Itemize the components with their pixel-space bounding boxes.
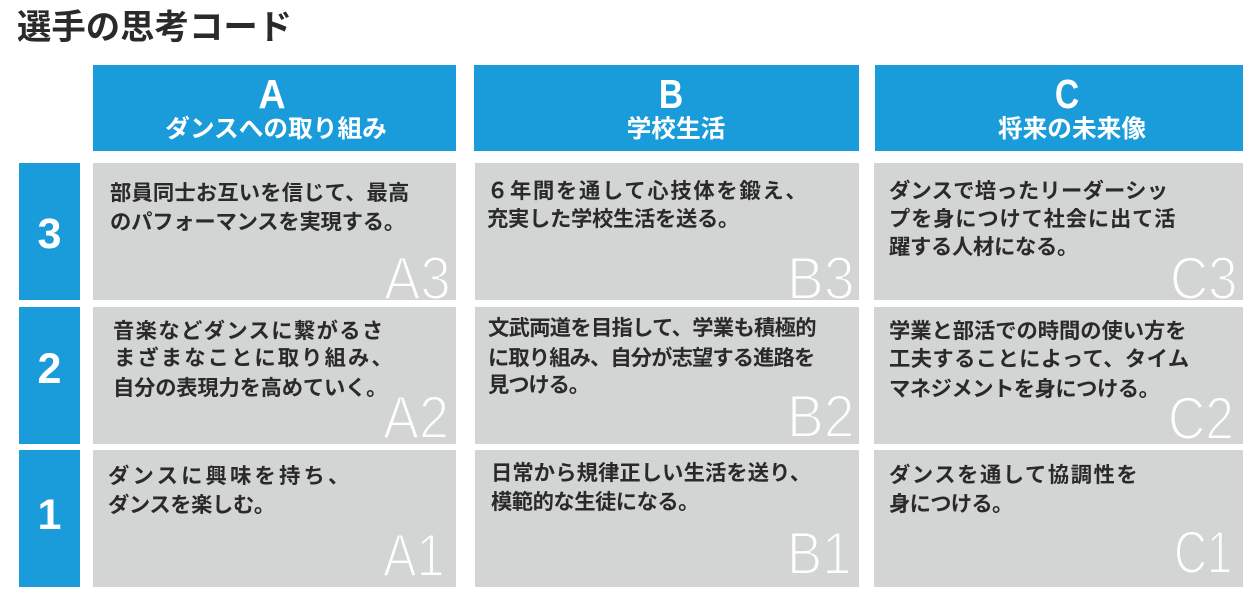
- cell A1: ダンスに興味を持ち、: [108, 464, 353, 488]
- cell A3: 部員同士お互いを信じて、最高: [110, 181, 409, 205]
- cell C1: [874, 450, 1243, 587]
- cell A2: まざまなことに取り組み、: [114, 346, 395, 370]
- cell B2: 文武両道を目指して、学業も積極的: [488, 316, 816, 340]
- row header 3: 3: [38, 210, 61, 258]
- row header 3: [19, 163, 80, 300]
- column header B: B: [659, 71, 683, 117]
- cell C2: 学業と部活での時間の使い方を: [889, 319, 1186, 343]
- cell B3: 充実した学校生活を送る。: [487, 207, 739, 231]
- cell A2: [93, 307, 456, 444]
- title: 選手の思考コード: [17, 9, 292, 47]
- cell B3: [475, 163, 859, 300]
- column header C: [875, 65, 1243, 151]
- cell C2: 工夫することによって、タイム: [889, 347, 1190, 371]
- cell B2: [475, 307, 859, 444]
- cell A1: A1: [383, 522, 445, 587]
- cell B2: 見つける。: [488, 373, 589, 397]
- column header B: 学校生活: [627, 116, 725, 143]
- cell B2: に取り組み、自分が志望する進路を: [488, 346, 814, 370]
- cell A2: 音楽などダンスに繋がるさ: [113, 319, 385, 343]
- row header 2: [19, 307, 80, 444]
- column header B: [474, 65, 859, 151]
- cell B1: [475, 450, 859, 587]
- cell B1: 日常から規律正しい生活を送り、: [491, 461, 811, 485]
- cell B1: B1: [787, 520, 852, 587]
- cell A3: のパフォーマンスを実現する。: [110, 210, 405, 234]
- cell C1: 身につける。: [889, 492, 1013, 516]
- column header C: C: [1055, 71, 1079, 117]
- row header 2: 2: [38, 345, 61, 393]
- cell A2: 自分の表現力を高めていく。: [113, 376, 387, 400]
- cell B3: ６年間を通して心技体を鍛え、: [487, 179, 808, 203]
- cell A1: [93, 450, 456, 587]
- column header A: A: [258, 71, 286, 117]
- cell A1: ダンスを楽しむ。: [108, 493, 275, 517]
- column header C: 将来の未来像: [998, 116, 1146, 143]
- cell C3: プを身につけて社会に出て活: [889, 207, 1176, 231]
- cell C2: マネジメントを身につける。: [889, 377, 1159, 401]
- column header A: ダンスへの取り組み: [165, 116, 387, 143]
- cell C1: ダンスを通して協調性を: [889, 463, 1139, 487]
- cell C3: 躍する人材になる。: [889, 235, 1078, 259]
- cell B1: 模範的な生徒になる。: [491, 490, 699, 514]
- cell C3: [874, 163, 1243, 300]
- cell C1: C1: [1174, 519, 1232, 586]
- cell A3: [93, 163, 456, 300]
- cell C3: ダンスで培ったリーダーシッ: [889, 179, 1168, 203]
- column header A: [93, 65, 456, 151]
- cell C2: [874, 307, 1243, 444]
- row header 1: [19, 450, 80, 587]
- row header 1: 1: [38, 491, 61, 539]
